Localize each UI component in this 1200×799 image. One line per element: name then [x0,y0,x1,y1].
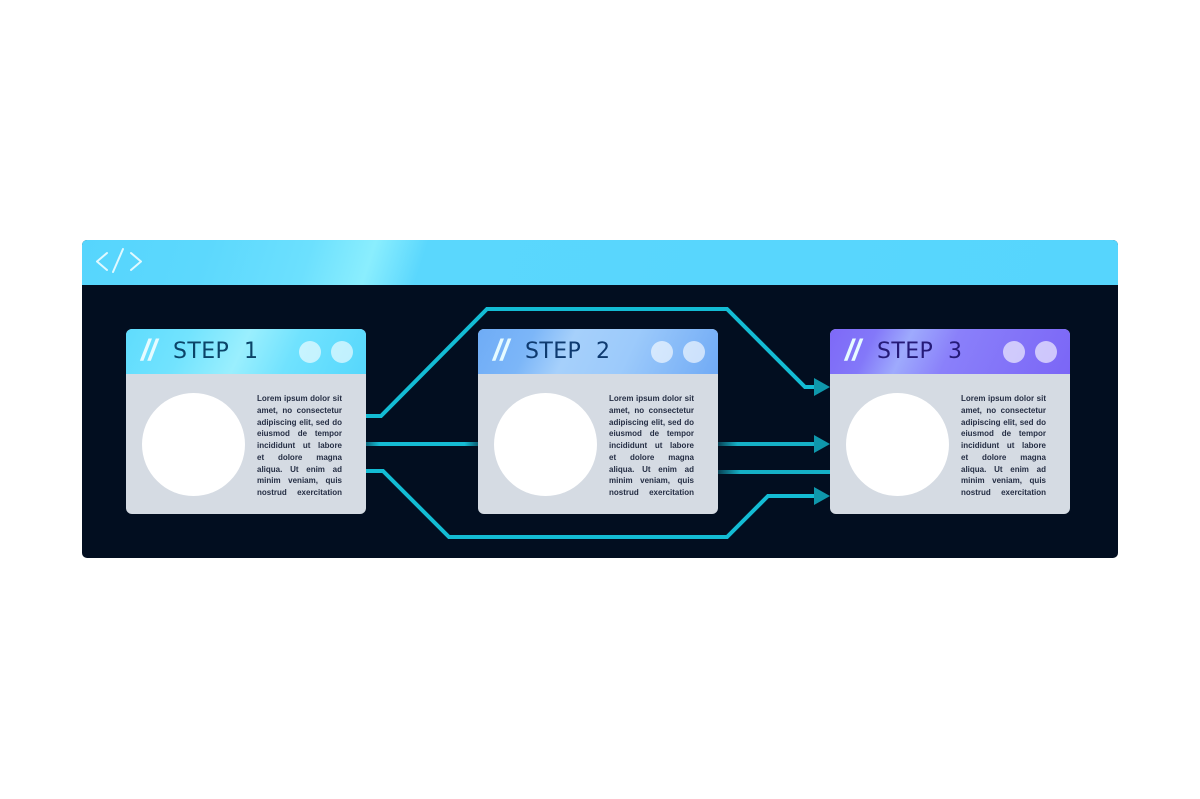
panel: step 1 card [126,329,366,514]
step 1 image circle [142,393,245,496]
arrow: step 1 to step 3 under the bottom [366,471,830,537]
step 2 text: aliqua. Ut enim ad [609,464,694,474]
step 1 text: minim veniam, quis [257,476,342,485]
step 3 text [961,394,1046,497]
step 3 text: amet, no consectetur [961,406,1046,415]
step 3 header: // [845,334,860,367]
step 2 text: amet, no consectetur [609,406,694,415]
step 2 text: minim veniam, quis [609,476,694,485]
step 3 text: et dolore magna [961,453,1046,462]
step 1 header: STEP 1 [173,339,258,364]
step 3 text: adipiscing elit, sed do [961,418,1046,426]
step 1 text: amet, no consectetur [257,406,342,415]
panel: dark window [82,240,1118,558]
step 1 header: // [141,334,156,367]
step 1 text: adipiscing elit, sed do [257,418,342,426]
step 3 text: minim veniam, quis [961,476,1046,485]
step 1 text: et dolore magna [257,453,342,462]
step 1 text: nostrud exercitation [257,488,342,497]
arrow: step 1 to step 2 [366,442,478,446]
step 3 text: aliqua. Ut enim ad [961,464,1046,474]
step 2 text: et dolore magna [609,453,694,462]
step 2 text: incididunt ut labore [609,441,694,450]
step 2 header: // [493,334,508,367]
step 3 text: incididunt ut labore [961,441,1046,450]
step 2 image circle [494,393,597,496]
step 3 text: Lorem ipsum dolor sit [961,394,1046,403]
step 2 text [609,394,694,497]
panel: step 2 card [478,329,718,514]
step 3 header: STEP 3 [877,339,962,364]
step 1 text: aliqua. Ut enim ad [257,464,342,474]
step 3 image circle [846,393,949,496]
step 1 text: incididunt ut labore [257,441,342,450]
step 2 header [478,329,718,374]
step 1 text: Lorem ipsum dolor sit [257,394,342,403]
step 3 header [830,329,1070,374]
step 2 text: eiusmod de tempor [609,429,694,438]
step 3 text: nostrud exercitation [961,488,1046,497]
step 3 text: eiusmod de tempor [961,429,1046,438]
panel: step 3 card [830,329,1070,514]
window title bar [82,240,1118,285]
step 1 header [126,329,366,374]
line: step 2 to step 3 lower [718,470,830,474]
step 2 text: nostrud exercitation [609,488,694,497]
step 2 header: STEP 2 [525,339,610,364]
step 1 text [257,394,342,497]
arrow: step 2 to step 3 upper [718,435,830,453]
arrow: step 1 to step 3 over the top [366,309,830,416]
step 2 text: Lorem ipsum dolor sit [609,394,694,403]
step 1 text: eiusmod de tempor [257,429,342,438]
step 2 text: adipiscing elit, sed do [609,418,694,426]
